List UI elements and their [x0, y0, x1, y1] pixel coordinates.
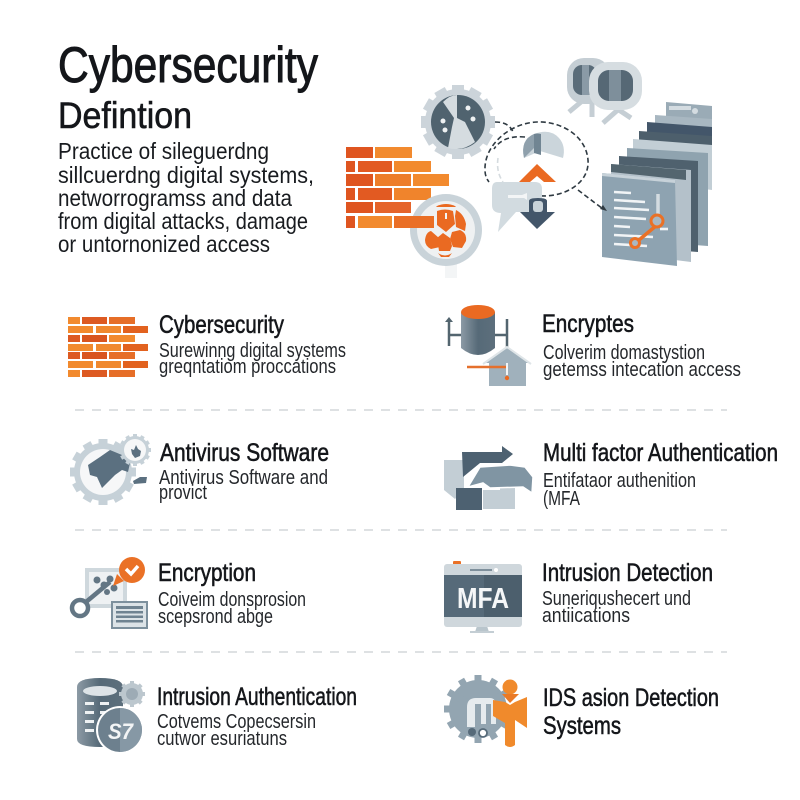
panel: cybersecurity — [68, 311, 346, 378]
icon: padlock with down arrow — [520, 198, 555, 229]
description: Antivirus Software and — [159, 467, 328, 489]
definition text block: sillcuerdng digital systems, — [58, 162, 314, 188]
heading — [543, 684, 719, 740]
description — [542, 588, 691, 627]
description: greqntatiom proccations — [159, 356, 336, 378]
hero illustration — [346, 58, 712, 278]
icon: key, badge and table — [72, 557, 147, 628]
description: cutwor esuriatuns — [157, 728, 287, 750]
description: provict — [159, 482, 207, 504]
description: Colverim domastystion — [543, 342, 705, 364]
definition text block: from digital attacks, damage — [58, 208, 308, 234]
icon: up chevron — [519, 164, 556, 182]
heading: IDS asion Detection — [543, 684, 719, 712]
divider 1 — [75, 409, 727, 411]
icon: MFA monitor — [444, 561, 522, 633]
icon: database, gear and badge: S7 — [108, 719, 135, 744]
icon: arrowhead — [600, 205, 607, 211]
heading: Systems — [543, 712, 621, 740]
icon: pie chart — [523, 132, 564, 158]
heading: Intrusion Detection — [542, 559, 713, 587]
description: Entifataor authenition — [543, 470, 696, 492]
panel: encryptes — [445, 305, 741, 386]
panel: intrusion detection — [444, 559, 713, 633]
icon: gear and orange figure — [444, 675, 527, 747]
icon: brick wall — [68, 317, 148, 377]
divider 2 — [75, 529, 727, 531]
panel: antivirus software — [70, 434, 329, 505]
icon: binoculars — [567, 58, 642, 123]
description: (MFA — [543, 488, 581, 510]
icon: gear with world map — [70, 434, 151, 505]
icon: key glyph — [508, 193, 527, 200]
heading: Encryption — [158, 559, 256, 587]
icon: MFA monitor: MFA — [457, 583, 509, 615]
icon: overlapping arrows — [444, 446, 533, 510]
definition text block: or untornonized access — [58, 231, 270, 257]
icon: document stack — [602, 102, 712, 266]
dashed connector arrows — [485, 122, 603, 209]
icon: database, gear and badge — [77, 678, 145, 754]
description — [543, 342, 741, 381]
panel: encryption — [72, 557, 306, 628]
subtitle: Defintion — [58, 95, 192, 136]
panel: intrusion authentication — [77, 678, 357, 754]
divider 3 — [75, 651, 727, 653]
description — [543, 470, 696, 510]
description — [157, 711, 316, 750]
description: antiications — [542, 605, 630, 627]
description: getemss intecation access — [543, 359, 741, 381]
definition text block: networrogramss and data — [58, 185, 293, 211]
description: Coiveim donsprosion — [158, 589, 306, 611]
heading: Antivirus Software — [160, 439, 329, 467]
description — [159, 467, 328, 504]
icon: magnifier with shield — [394, 194, 482, 278]
title: Cybersecurity — [58, 37, 318, 93]
panel: multi factor authentication — [444, 439, 778, 510]
description — [159, 340, 346, 378]
icon: database and house — [445, 305, 531, 386]
description: Surewinng digital systems — [159, 340, 346, 362]
icon: brick wall — [346, 147, 449, 228]
heading: Cybersecurity — [159, 311, 284, 339]
panel: IDS — [444, 675, 719, 747]
icon: gear with globe — [421, 85, 495, 159]
description: scepsrond abge — [158, 606, 273, 628]
description — [158, 589, 306, 628]
definition text block — [58, 138, 314, 257]
heading: Intrusion Authentication — [157, 683, 357, 711]
description: Cotvems Copecsersin — [157, 711, 316, 733]
heading: Encryptes — [542, 310, 634, 338]
description: Suneriqushecert und — [542, 588, 691, 610]
definition text block: Practice of sileguerdng — [58, 138, 269, 164]
icon: speech bubble — [492, 182, 542, 232]
